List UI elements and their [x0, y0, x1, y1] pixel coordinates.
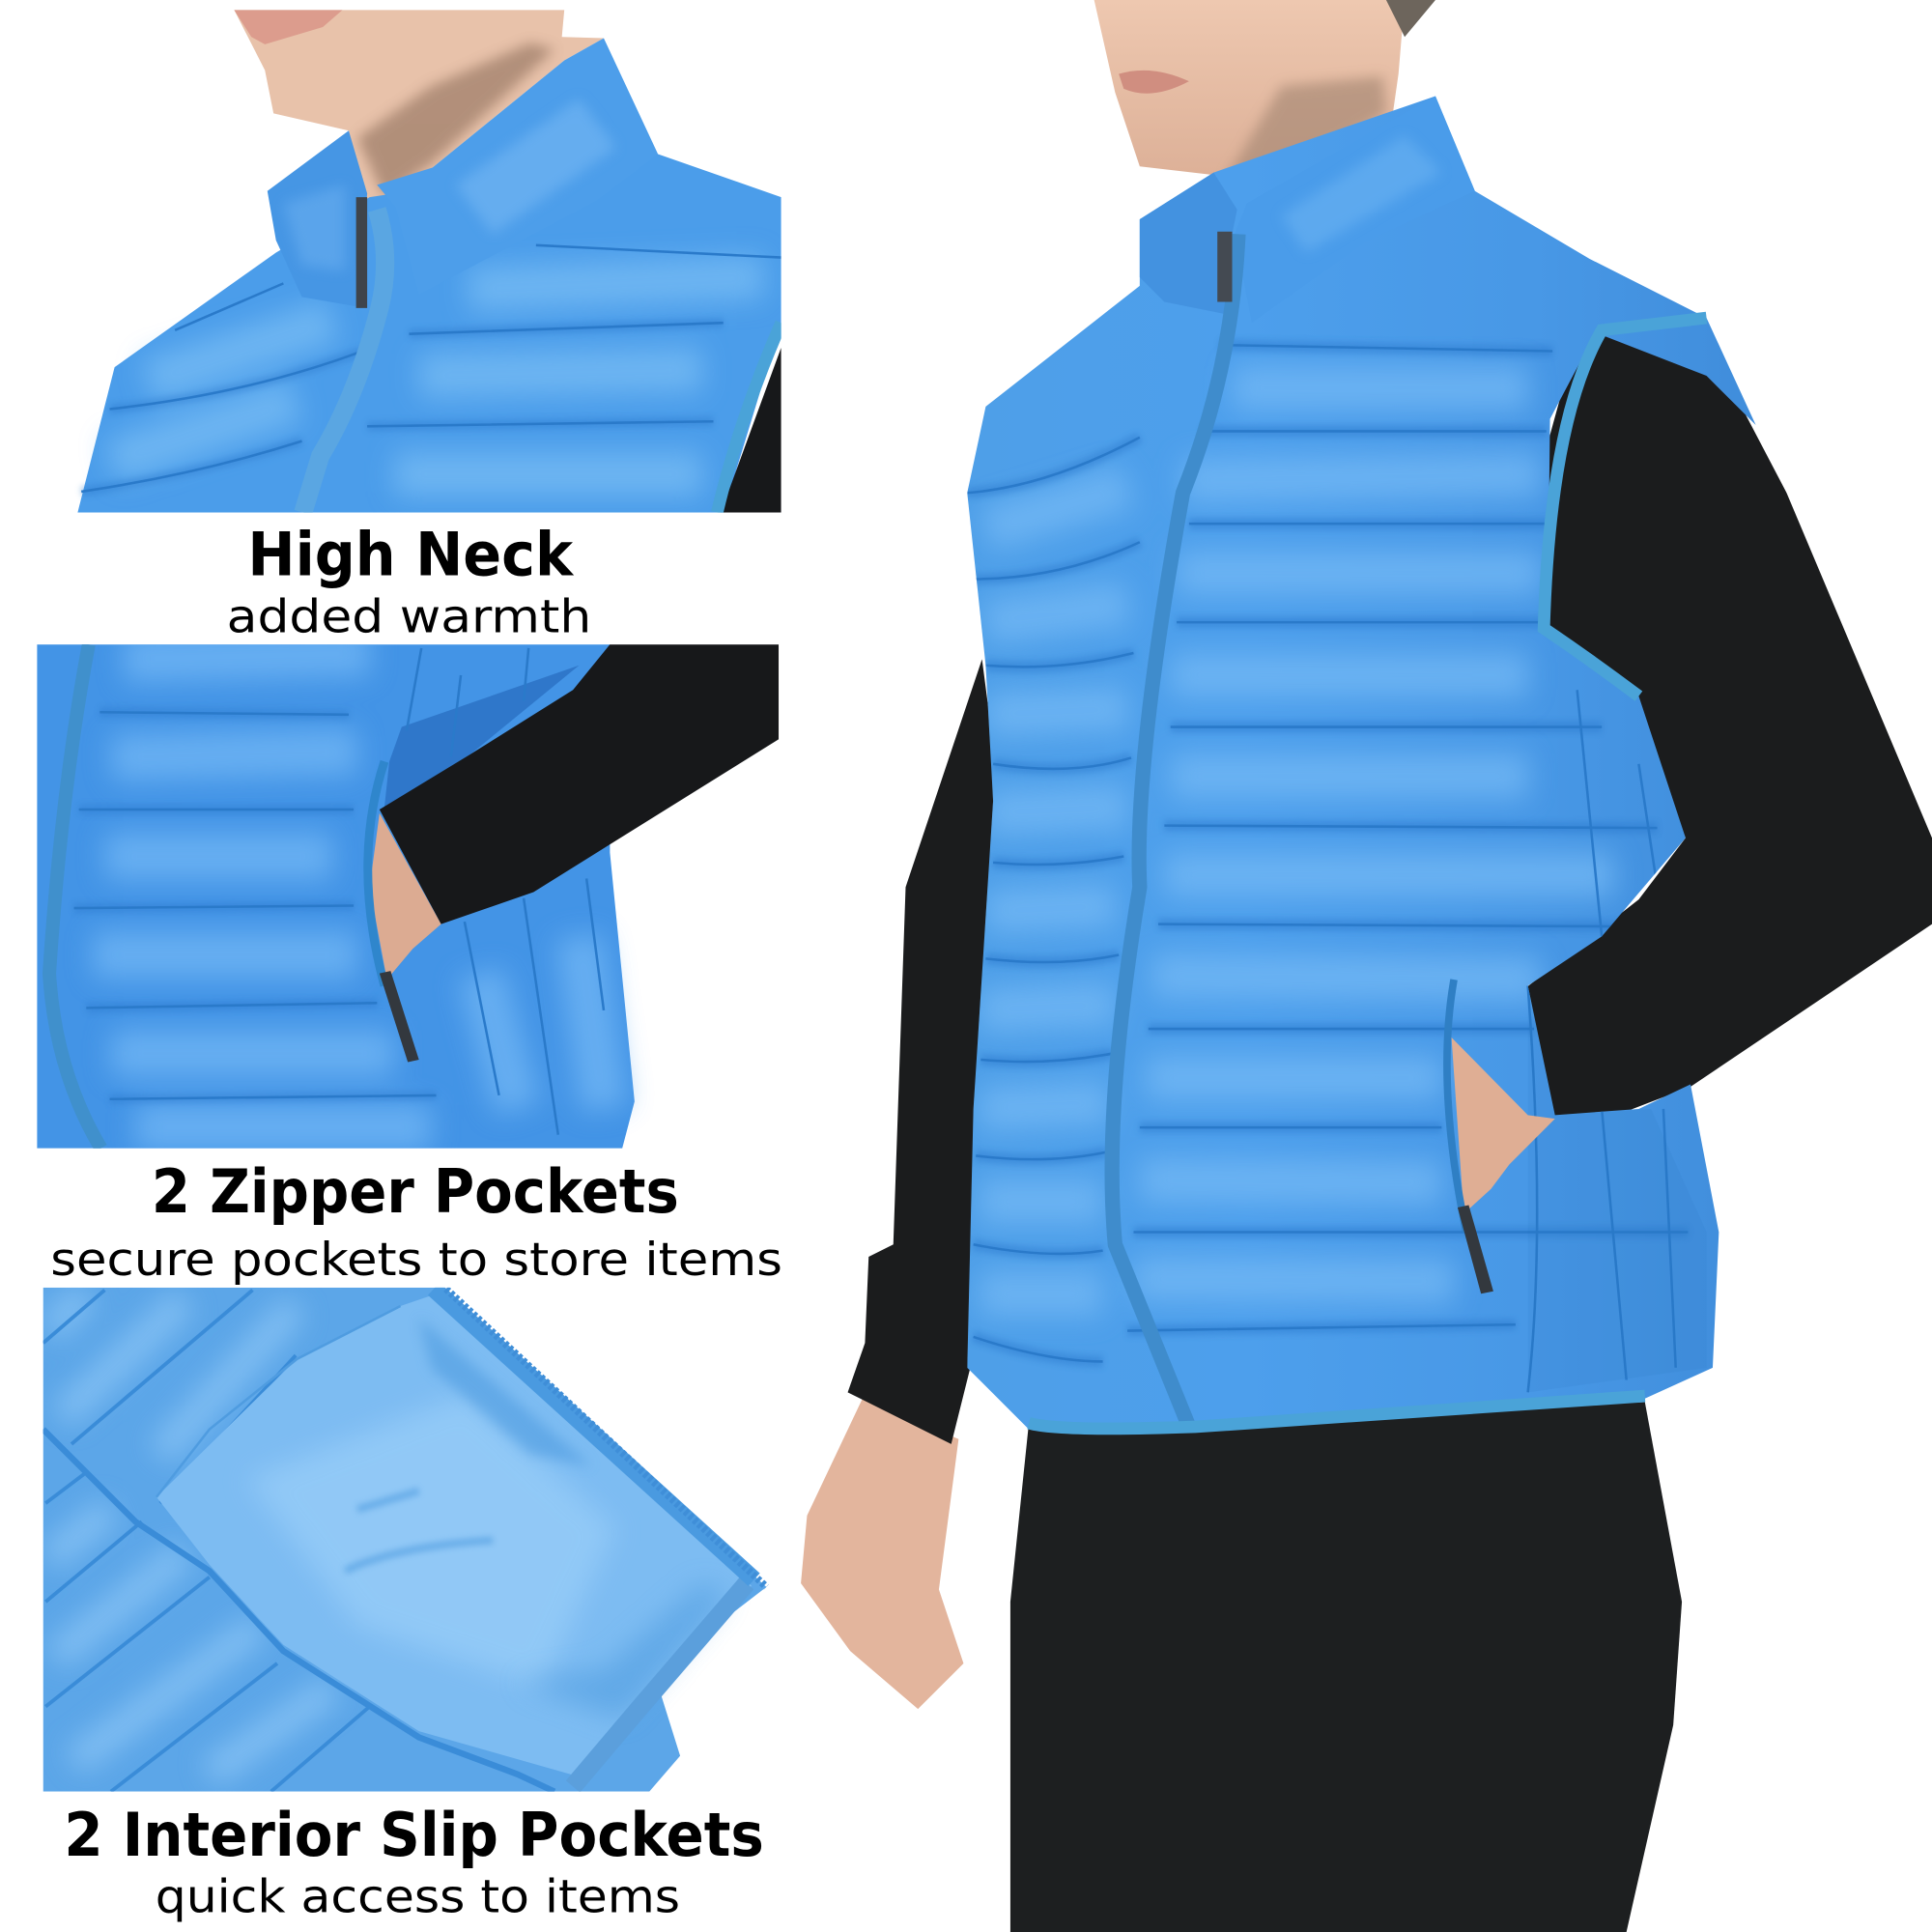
seam shadows — [74, 712, 437, 1099]
pocket zipper pull — [1458, 1205, 1493, 1293]
hem trim — [1029, 1396, 1645, 1429]
heading: 2 zipper pockets: 2 Zipper Pockets — [152, 1156, 679, 1227]
side panel shading — [1528, 985, 1707, 1392]
collar sheen — [456, 99, 616, 234]
inner slip pocket lining — [156, 1292, 752, 1776]
right sleeve — [1525, 314, 1932, 1119]
subheading: quick access: quick access to items — [156, 1871, 680, 1924]
lips — [234, 10, 343, 44]
collar — [1235, 96, 1475, 323]
collar sheen — [1282, 135, 1441, 252]
collar left — [268, 130, 367, 307]
lining wrinkles — [345, 1491, 493, 1571]
face — [234, 10, 604, 215]
panel: interior slip pockets closeup — [43, 1288, 766, 1792]
vest body — [37, 644, 635, 1149]
outer quilted shell — [43, 1288, 766, 1792]
zipper teeth — [446, 1289, 766, 1587]
left sleeve — [848, 659, 1001, 1444]
dark side panel under sleeve — [384, 666, 579, 807]
panel: zipper pockets closeup — [37, 644, 779, 1149]
armhole trim — [1544, 318, 1707, 696]
subheading: secure pockets: secure pockets to store items — [50, 1234, 782, 1287]
quilting seams — [967, 345, 1688, 1392]
heading: 2 interior slip pockets: 2 Interior Slip Pockets — [64, 1800, 764, 1870]
center zipper — [1112, 234, 1238, 1427]
zipper pull — [1217, 232, 1233, 301]
pocket zipper — [1447, 980, 1466, 1233]
lining shadow lower right — [518, 1583, 727, 1719]
pants — [1010, 1403, 1682, 1932]
zipper pull — [356, 197, 367, 308]
center zipper — [49, 644, 101, 1149]
lining shadow upper — [419, 1319, 591, 1466]
heading: high neck: High Neck — [247, 520, 574, 590]
right hand in pocket — [1452, 1037, 1555, 1213]
hair — [1386, 0, 1435, 37]
seam shadows — [81, 323, 724, 492]
quilted highlights — [49, 1293, 332, 1775]
seam shadows — [967, 345, 1688, 1361]
vest highlights — [980, 388, 1614, 1293]
highlights — [111, 277, 764, 474]
hem band — [573, 1583, 747, 1786]
zipper pull — [380, 971, 419, 1062]
left hand — [801, 1399, 963, 1709]
main photo: man wearing blue vest — [801, 0, 1932, 1932]
collar left — [1140, 173, 1237, 314]
black sleeve — [721, 348, 781, 513]
subheading: added warmth: added warmth — [227, 590, 591, 643]
pocket zipper — [368, 761, 384, 985]
zipper — [303, 210, 385, 513]
pocket seam — [43, 1430, 554, 1792]
armhole trim — [717, 323, 781, 513]
collar left sheen — [283, 185, 345, 271]
quilt seams — [43, 1290, 370, 1792]
panel: high neck closeup — [77, 10, 781, 513]
highlights — [93, 653, 604, 1127]
lining sheen — [246, 1392, 616, 1688]
zipper tape — [434, 1289, 754, 1579]
neck shadow — [1226, 76, 1386, 197]
seams — [74, 648, 604, 1135]
vest body — [77, 154, 781, 513]
stitched pocket edge — [156, 1306, 401, 1497]
mouth — [1119, 71, 1189, 94]
black sleeve — [380, 644, 779, 924]
head and neck — [1094, 0, 1405, 215]
vest — [961, 86, 1775, 1441]
neck shadow — [357, 43, 554, 197]
hand — [370, 813, 441, 980]
collar right — [377, 39, 659, 267]
seams — [81, 245, 781, 492]
